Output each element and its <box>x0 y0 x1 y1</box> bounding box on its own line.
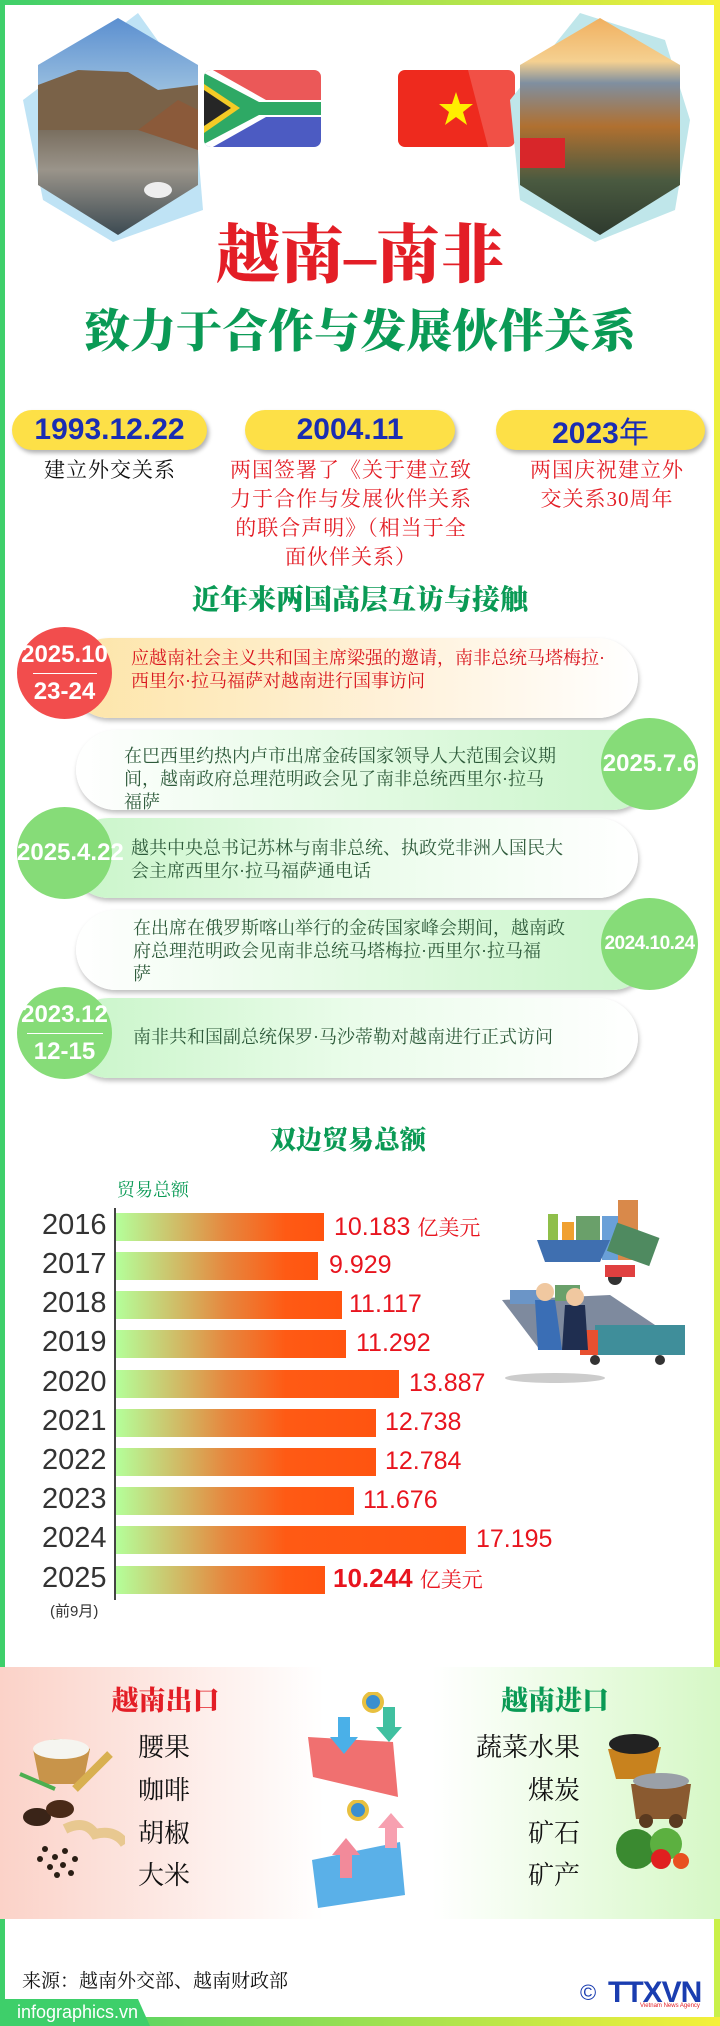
text <box>131 648 605 691</box>
date circle: 2025.4.22 <box>17 839 124 866</box>
icon: import products <box>608 1734 691 1869</box>
export items <box>138 1733 190 1890</box>
bars: 17.195 <box>476 1525 552 1553</box>
axis label: 贸易总额 <box>117 1180 189 1200</box>
footer tab: infographics.vn <box>0 1999 150 2026</box>
milestone 2 <box>230 410 472 569</box>
logo: TTXVN: TTXVN <box>608 1976 701 2009</box>
desc 2004: 的联合声明》（相当于全 <box>235 516 467 540</box>
bars: 11.676 <box>363 1486 438 1514</box>
bars: 10.244 亿美元 <box>333 1563 483 1593</box>
card 5 <box>17 987 642 1084</box>
bottom bar <box>0 2017 720 2026</box>
desc 2004: 面伙伴关系） <box>285 545 417 569</box>
bars: 2020 <box>42 1366 107 1398</box>
milestone 3 <box>496 408 710 511</box>
text: 萨 <box>133 964 151 984</box>
import items: 矿石 <box>528 1819 580 1848</box>
text <box>131 838 563 881</box>
date circle: 2025.10 23-24 <box>21 641 108 705</box>
photo: Vietnam mountain hexagon <box>510 13 690 242</box>
export items: 咖啡 <box>138 1776 190 1805</box>
title: 越南–南非 <box>216 220 504 291</box>
card 4 <box>74 898 698 996</box>
date pill 2023 <box>496 410 705 450</box>
date circle: 2025.7.6 <box>603 750 696 777</box>
bars: 12.784 <box>385 1447 461 1475</box>
logo: TTXVN: Vietnam News Agency <box>640 2003 700 2009</box>
text: 在巴西里约热内卢市出席金砖国家领导人大范围会议期 <box>124 746 556 766</box>
photo: Cape Town hexagon <box>23 13 203 242</box>
bars: 2018 <box>42 1287 107 1319</box>
text: 南非共和国副总统保罗·马沙蒂勒对越南进行正式访问 <box>133 1027 553 1047</box>
bars: 10.183 亿美元 <box>334 1213 480 1241</box>
import items <box>476 1733 580 1890</box>
export items: 胡椒 <box>138 1819 190 1848</box>
date pill 2023: 2023年 <box>552 408 649 452</box>
date circle: 2024.10.24 <box>604 933 695 954</box>
bars: 2019 <box>42 1326 107 1358</box>
card 2 <box>74 718 698 816</box>
desc 2023 <box>530 458 684 511</box>
bars: 2023 <box>42 1483 107 1515</box>
desc 2023: 两国庆祝建立外 <box>530 458 684 482</box>
text: 越共中央总书记苏林与南非总统、执政党非洲人国民大 <box>131 838 563 858</box>
desc 2004: 两国签署了《关于建立致 <box>230 458 472 482</box>
desc 2004: 力于合作与发展伙伴关系 <box>230 487 472 511</box>
text: 西里尔·拉马福萨对越南进行国事访问 <box>131 671 425 691</box>
date pill 2004 <box>245 410 455 450</box>
bars: (前9月) <box>50 1603 98 1620</box>
bars: 2016 <box>42 1209 107 1241</box>
icon: export products <box>19 1739 125 1878</box>
bars: 2017 <box>42 1248 107 1280</box>
import items: 矿产 <box>528 1861 580 1890</box>
date circle <box>601 898 698 990</box>
text: 福萨 <box>124 792 160 812</box>
date pill 2004: 2004.11 <box>297 413 403 446</box>
date circle <box>17 987 112 1079</box>
bars: 11.292 <box>356 1329 431 1357</box>
bars: 12.738 <box>385 1408 461 1436</box>
date pill 1993 <box>12 410 207 450</box>
date circle: 2023.12 12-15 <box>21 1001 108 1065</box>
text <box>124 746 556 812</box>
card 1 <box>17 627 642 724</box>
icon: container with up arrows <box>312 1800 405 1908</box>
icon: container with down arrows <box>308 1692 402 1797</box>
bars <box>42 1209 552 1620</box>
text: 间，越南政府总理范明政会见了南非总统西里尔·拉马 <box>124 769 544 789</box>
footer tab: infographics.vn: infographics.vn <box>17 2002 138 2022</box>
import heading: 越南进口 <box>501 1686 609 1716</box>
desc 1993: 建立外交关系 <box>44 458 176 482</box>
heading: visits: 近年来两国高层互访与接触 <box>192 585 528 616</box>
panel: import/export <box>0 1667 720 1919</box>
milestone 1 <box>12 410 212 482</box>
desc 2004 <box>230 458 472 569</box>
heading: trade: 双边贸易总额 <box>270 1126 426 1155</box>
import items: 煤炭 <box>528 1776 580 1805</box>
text <box>133 918 565 984</box>
text: 在出席在俄罗斯喀山举行的金砖国家峰会期间，越南政 <box>133 918 565 938</box>
bars: 13.887 <box>409 1369 485 1397</box>
flag: Vietnam <box>398 70 515 147</box>
bars: 2025 <box>42 1562 107 1594</box>
desc 2023: 交关系30周年 <box>540 487 674 511</box>
export items: 大米 <box>138 1861 190 1890</box>
bars: 2021 <box>42 1405 107 1437</box>
import items: 蔬菜水果 <box>476 1733 580 1762</box>
source text: 来源：越南外交部、越南财政部 <box>22 1971 288 1992</box>
bars: 9.929 <box>329 1251 392 1279</box>
bars: 11.117 <box>349 1290 422 1318</box>
left border <box>0 0 5 2026</box>
date circle <box>17 627 112 719</box>
text: 府总理范明政会见南非总统马塔梅拉·西里尔·拉马福 <box>133 941 541 961</box>
date circle <box>17 807 112 899</box>
subtitle: 致力于合作与发展伙伴关系 <box>84 306 636 357</box>
date circle <box>601 718 698 810</box>
export heading: 越南出口 <box>112 1686 220 1716</box>
text: 会主席西里尔·拉马福萨通电话 <box>131 861 371 881</box>
bars: 2024 <box>42 1522 107 1554</box>
export items: 腰果 <box>138 1733 190 1762</box>
text: 应越南社会主义共和国主席梁强的邀请，南非总统马塔梅拉· <box>131 648 605 668</box>
card 3 <box>17 807 642 904</box>
illustration: trade ship and businessmen <box>502 1200 685 1383</box>
logo: TTXVN: © <box>580 1980 596 2005</box>
flag: South Africa <box>204 70 321 147</box>
top border <box>0 0 720 5</box>
date pill 1993: 1993.12.22 <box>34 413 185 446</box>
right border <box>714 0 720 2026</box>
bars: 2022 <box>42 1444 107 1476</box>
